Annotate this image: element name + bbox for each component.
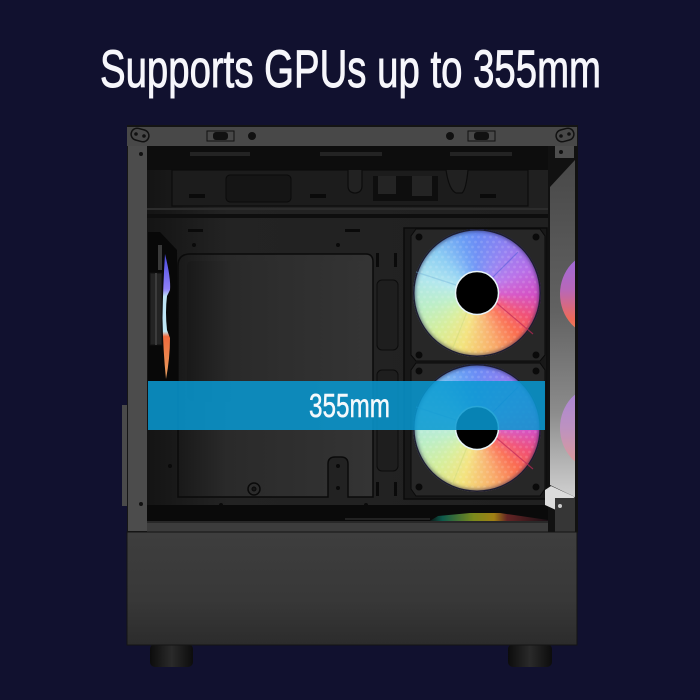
bottom opening with RGB reflection bbox=[147, 505, 555, 532]
cable slots bbox=[376, 253, 398, 496]
left rear fan seen edge-on bbox=[148, 232, 178, 381]
fan: bottom bbox=[413, 364, 541, 492]
fan: partial through glass, bottom bbox=[560, 394, 575, 462]
measurement bar: 355mm bbox=[148, 381, 545, 430]
icon: left foot of the case bbox=[150, 644, 193, 667]
left pillar bbox=[128, 146, 147, 531]
fan mounting frame bbox=[404, 228, 547, 499]
fan: partial through glass, top bbox=[560, 260, 575, 328]
right side glass panel bbox=[545, 146, 578, 532]
fan: top bbox=[413, 229, 541, 357]
measurement label: 355mm bbox=[309, 387, 390, 424]
top bar bbox=[127, 125, 578, 146]
PC case interior bbox=[127, 125, 578, 533]
top recess bbox=[147, 146, 550, 247]
front shroud bbox=[127, 532, 577, 645]
motherboard tray bbox=[168, 254, 373, 507]
icon: right foot of the case bbox=[508, 644, 552, 667]
bracket: rear expansion side bbox=[122, 405, 128, 506]
